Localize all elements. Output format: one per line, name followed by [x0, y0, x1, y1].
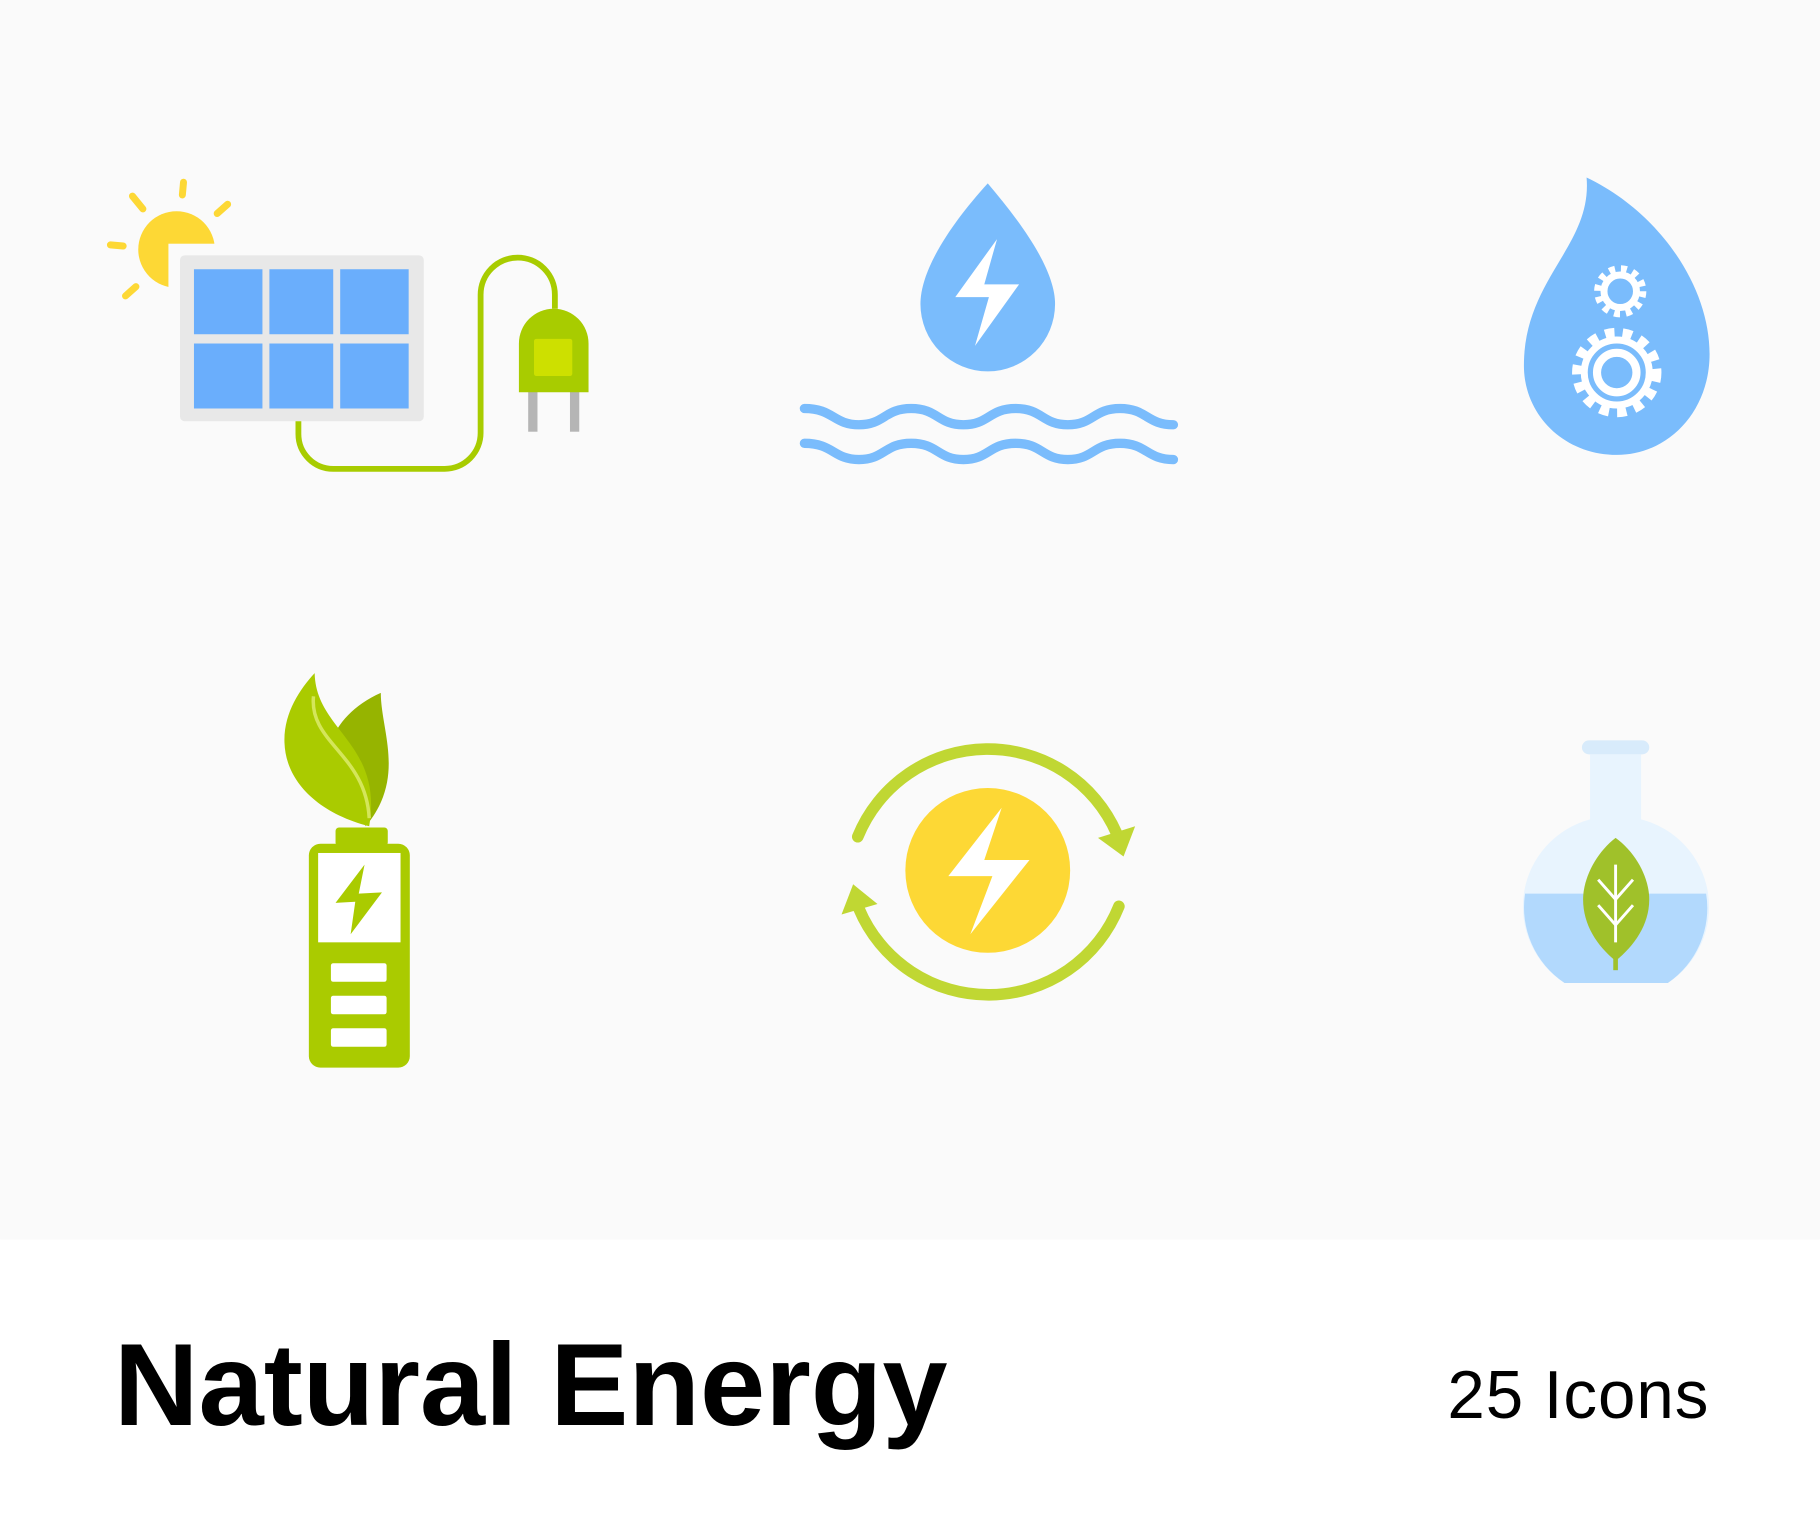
- icon: renewable energy cycle: [842, 749, 1135, 995]
- icon: solar panel with plug: [110, 182, 589, 469]
- icon: green battery with leaves: [284, 673, 410, 1068]
- icon: drop with gears: [1524, 178, 1710, 455]
- sun: [110, 182, 228, 296]
- icon: hydro power drop with waves: [804, 183, 1173, 460]
- icon count: 25 Icons: [1447, 1358, 1708, 1433]
- icon: flask with leaf: [1523, 740, 1709, 983]
- title: Natural Energy: [114, 1319, 948, 1450]
